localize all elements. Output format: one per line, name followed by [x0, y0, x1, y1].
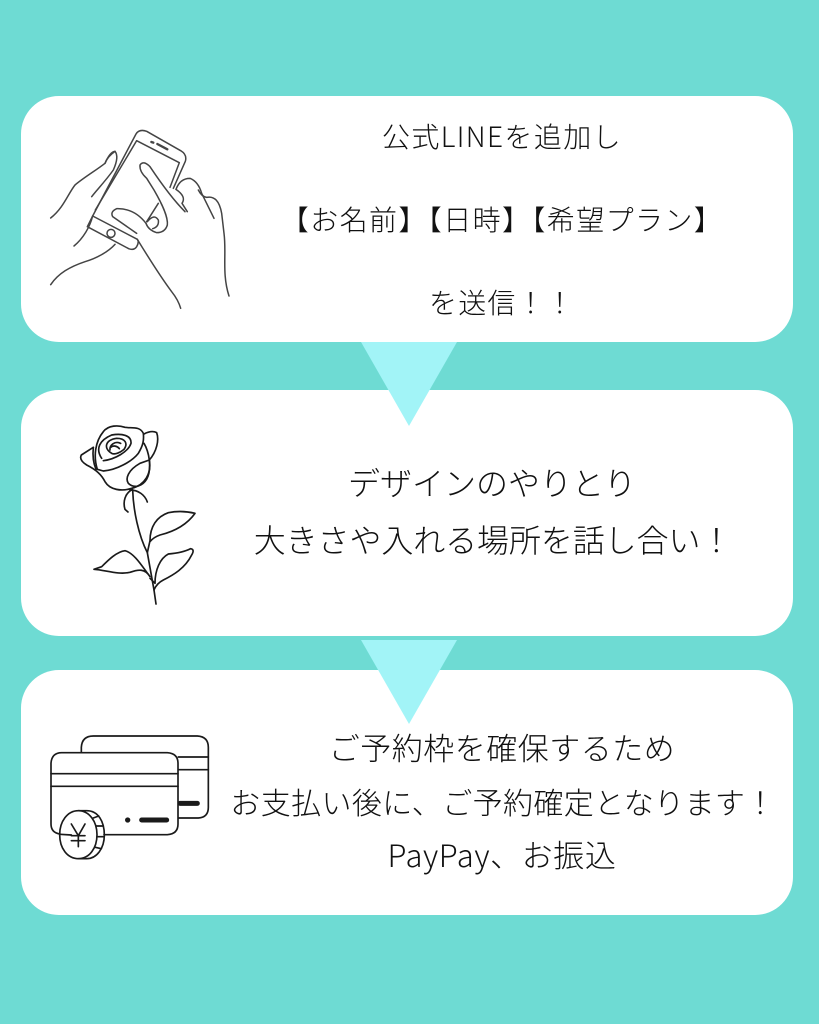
- yen coin: [60, 811, 104, 859]
- text: step 2 line 1: デザインのやりとり: [348, 459, 636, 505]
- text: step 2 line 2: 大きさや入れる場所を話し合い！: [254, 516, 732, 562]
- back card: [81, 736, 208, 818]
- arrow: step 1 to step 2: [361, 342, 457, 426]
- text: step 1 line 1: 公式LINEを追加し: [382, 116, 622, 156]
- text: step 3 line 2: お支払い後に、ご予約確定となります！: [230, 779, 776, 823]
- text: step 3 line 1: ご予約枠を確保するため: [329, 724, 675, 769]
- arrow: step 2 to step 3: [361, 640, 457, 724]
- front card: [51, 753, 178, 835]
- panel: step 1 add LINE: [21, 96, 793, 342]
- icon: rose line drawing: [80, 425, 196, 605]
- text: step 3 line 3: PayPay、お振込: [387, 831, 617, 876]
- icon: bank cards with yen coin: [50, 735, 210, 860]
- text: step 1 line 2: 【お名前】【日時】【希望プラン】: [281, 199, 723, 239]
- text: step 1 line 3: を送信！！: [429, 282, 575, 322]
- panel: step 2 design discussion: [21, 390, 793, 636]
- panel: step 3 payment: [21, 670, 793, 915]
- icon: hands holding smartphone: [50, 130, 230, 310]
